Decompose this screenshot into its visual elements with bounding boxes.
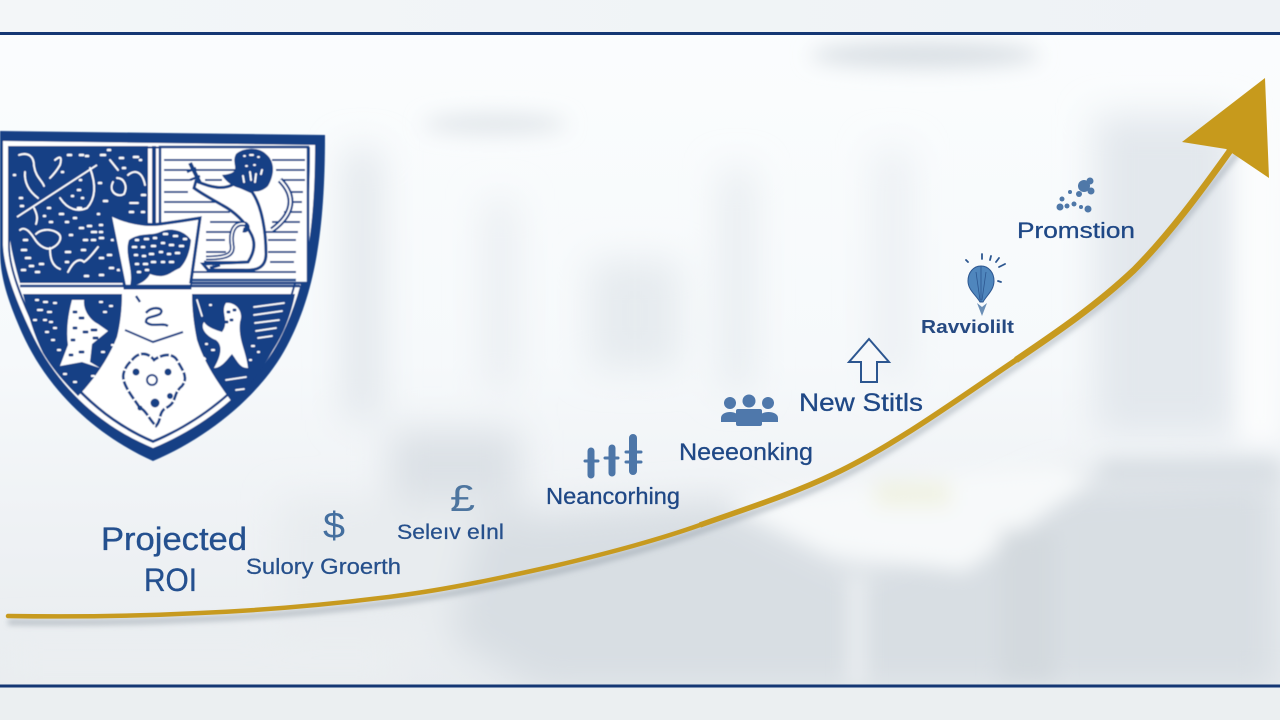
lion figure [187, 149, 290, 270]
top rule [0, 32, 1280, 35]
shield white line [3, 141, 315, 448]
panel: bottom right dark quarter [192, 294, 295, 402]
icon: dollar: $ [323, 505, 345, 546]
arrow head [1182, 78, 1269, 178]
arrow curve thick end [1016, 148, 1232, 360]
shield thin line [8, 146, 310, 443]
panel: top right striped quarter [160, 147, 308, 283]
step: networking two: Neeeonking [679, 439, 813, 466]
step: new skills: New Stitls [799, 389, 923, 417]
arrow curve middle [700, 148, 1232, 525]
heading: Projected ROI: Projected [101, 521, 247, 557]
growth arrow [8, 78, 1269, 622]
step: salary: Seleıv eInl [397, 521, 504, 544]
top band [0, 0, 1280, 32]
icon: currency: £ [450, 478, 475, 519]
bottom band [0, 688, 1280, 720]
step: new skills [799, 339, 923, 417]
step: promotion [1017, 178, 1135, 243]
icon: people [585, 438, 641, 475]
shield outer [0, 131, 325, 461]
step: networking one [546, 438, 680, 509]
icon: cluster [1056, 178, 1094, 212]
icon: up arrow [849, 339, 889, 382]
centre charge [125, 296, 183, 342]
bottom charge [123, 354, 185, 426]
arrow curve [8, 148, 1232, 616]
step: salary growth [246, 505, 401, 579]
panel: centre escutcheon [110, 214, 200, 288]
heading: Projected ROI [101, 521, 247, 598]
bottom rule [0, 684, 1280, 688]
horizontal band [20, 285, 300, 287]
step: networking two [679, 394, 813, 466]
step: salary growth: Sulory Groerth [246, 554, 401, 579]
heading: Projected ROI: ROI [144, 562, 197, 598]
step: salary [397, 478, 504, 544]
step: promotion: Promstion [1017, 218, 1135, 243]
step: lightbulb: Ravviolilt [921, 317, 1014, 337]
icon: lightbulb [966, 254, 1005, 316]
panel: bottom left dark quarter [23, 294, 122, 396]
step: lightbulb [921, 254, 1014, 337]
step: networking one: Neancorhing [546, 483, 680, 509]
shield field [10, 148, 308, 440]
crest shield [0, 131, 325, 461]
panel: top left dark quarter [8, 146, 156, 283]
arrow shadow [8, 150, 1240, 622]
icon: team [721, 394, 778, 426]
